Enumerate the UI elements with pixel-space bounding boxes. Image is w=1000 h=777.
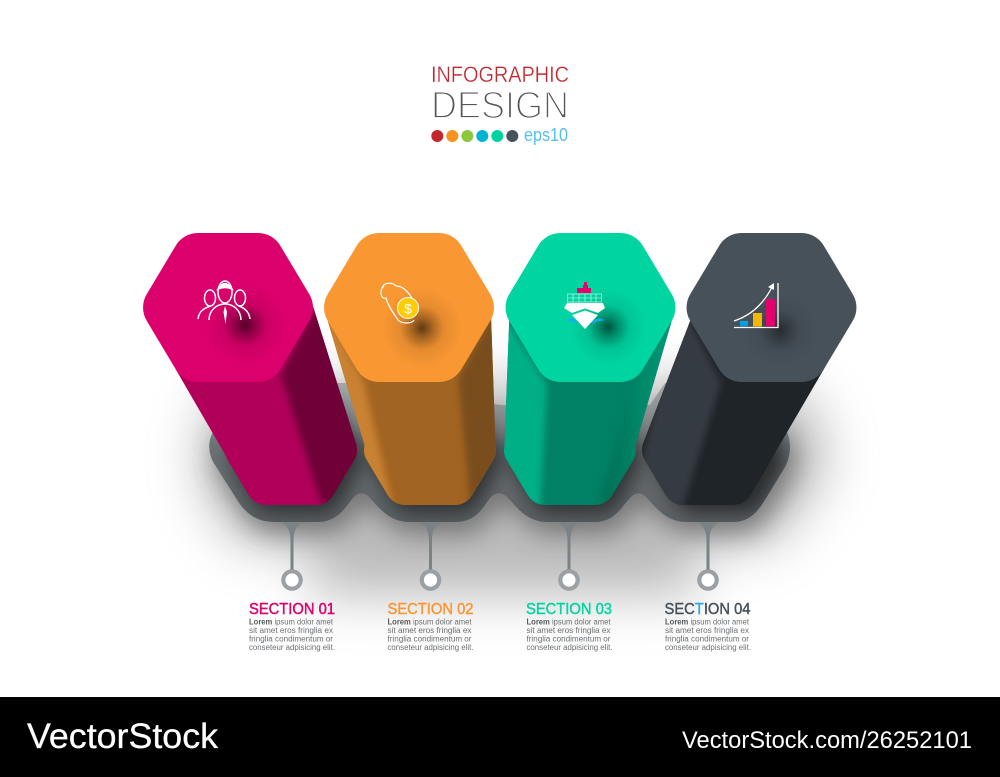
icon shadow [382, 288, 462, 368]
icon shadow [205, 285, 285, 365]
section 01 text [249, 601, 335, 652]
icon: hand with dollar coin [381, 283, 418, 323]
footer url: VectorStock.com/26252101 [682, 727, 972, 754]
body copy: conseteur adpisicing elit. [526, 643, 612, 652]
body copy: fringlia condimentum or [388, 634, 472, 644]
stem 2 [418, 522, 442, 591]
heading: infographic: INFOGRAPHIC [431, 62, 569, 87]
body copy: conseteur adpisicing elit. [249, 643, 335, 652]
stem 4 [696, 522, 720, 591]
column 3: green [504, 233, 676, 505]
heading: design: DESIGN [431, 85, 569, 127]
icon: hand with dollar coin: $ [404, 300, 412, 316]
top face [143, 233, 313, 382]
column body [328, 294, 496, 505]
body copy: fringlia condimentum or [665, 634, 749, 644]
column 4: dark [630, 233, 856, 510]
column body [642, 320, 824, 505]
body copy: Lorem ipsum dolor amet [388, 618, 472, 626]
column body [504, 320, 672, 505]
section 03 text [526, 601, 612, 652]
body copy: fringlia condimentum or [526, 634, 611, 644]
label: eps10: eps10 [524, 125, 568, 145]
plate [209, 383, 790, 522]
body copy: Lorem ipsum dolor amet [526, 618, 611, 626]
body copy [665, 618, 751, 652]
heading: SECTION 03 [526, 601, 612, 618]
plate inner shadows [231, 403, 786, 513]
body copy: Lorem ipsum dolor amet [249, 618, 334, 626]
title block [431, 62, 569, 145]
column body [176, 294, 357, 505]
top face [324, 233, 494, 382]
body copy: fringlia condimentum or [249, 634, 333, 644]
icon shadow [568, 287, 648, 367]
footer bar [0, 697, 1000, 777]
column 2: orange [324, 233, 496, 505]
icon: growth chart [734, 283, 778, 328]
body copy: sit amet eros fringlia ex [665, 626, 749, 635]
icon shadow [742, 292, 818, 368]
body copy [388, 618, 474, 652]
heading: SECTION 02 [388, 601, 474, 618]
connector plate with stems [209, 383, 790, 591]
heading: SECTION 04 [664, 601, 751, 618]
section 04 text [664, 601, 751, 652]
body copy: conseteur adpisicing elit. [665, 643, 751, 652]
colour hexagon dots [431, 130, 518, 142]
stem 1 [280, 522, 304, 591]
body copy [249, 618, 335, 652]
body copy: sit amet eros fringlia ex [526, 626, 610, 635]
icon: team of people [198, 281, 250, 324]
body copy: sit amet eros fringlia ex [388, 626, 472, 635]
body copy: Lorem ipsum dolor amet [665, 618, 750, 626]
column 1: pink [143, 233, 357, 505]
body copy: sit amet eros fringlia ex [249, 626, 333, 635]
icon: ship [564, 282, 605, 329]
footer brand: VectorStock [27, 717, 219, 756]
stem 3 [557, 522, 581, 591]
body copy [526, 618, 612, 652]
soft ground shadow [200, 385, 826, 595]
heading: SECTION 01 [249, 601, 335, 618]
section 02 text [388, 601, 474, 652]
top face [687, 233, 856, 382]
body copy: conseteur adpisicing elit. [388, 643, 474, 652]
top face [506, 233, 675, 382]
